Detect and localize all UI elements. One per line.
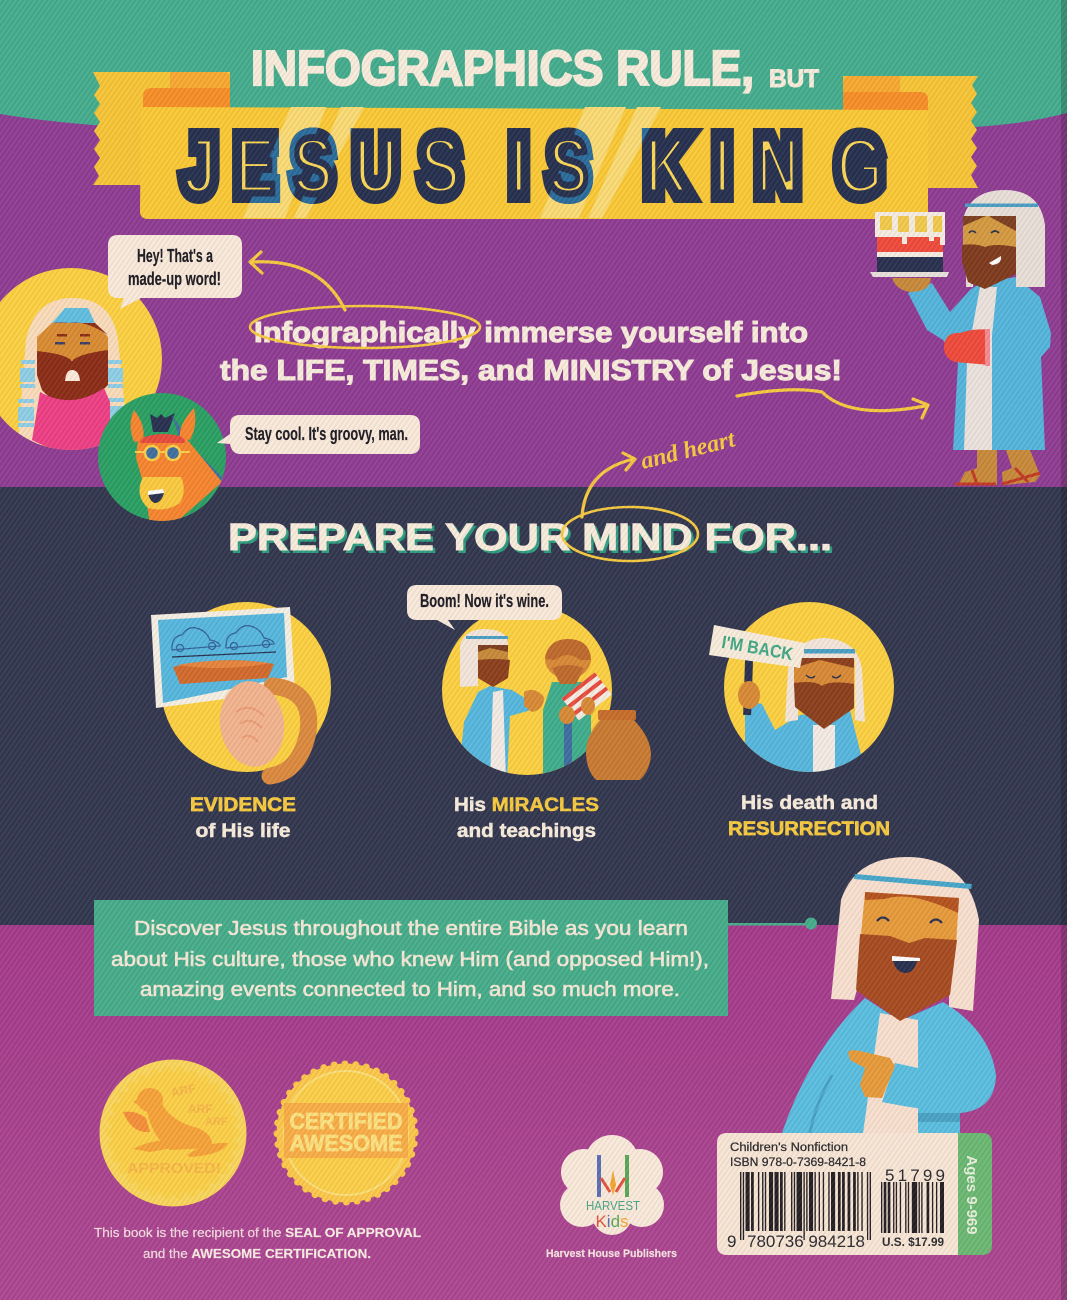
caption about seals: [94, 1226, 421, 1261]
teal description box: about His culture, those who knew Him (and opposed Him!),: [111, 948, 709, 971]
Jesus head: [460, 629, 508, 687]
speech bubble: made-up word: [108, 235, 242, 309]
label: miracles: and teachings: [457, 820, 596, 842]
background: navy band: [0, 487, 1067, 926]
banner right flap: [843, 76, 978, 188]
publisher name: Harvest House Publishers: [546, 1248, 677, 1260]
head and neck: [136, 438, 222, 525]
book category and ISBN: Children's Nonfiction: [730, 1140, 848, 1154]
photo card: [151, 607, 295, 708]
background: magenta band: [0, 925, 1067, 1300]
book category and ISBN: [730, 1140, 866, 1169]
ears: [130, 410, 144, 442]
teal description box: [94, 900, 728, 1016]
beard: [794, 682, 854, 729]
barcode digits: 780736 984218: [747, 1232, 865, 1251]
robe fold: [810, 1075, 832, 1133]
certified awesome seal: [276, 1064, 416, 1202]
water jar: [586, 710, 651, 780]
Jesus Is King lettering: JESUS IS KING: [183, 120, 883, 210]
speech bubble: wine: [407, 585, 562, 630]
section heading: Prepare your mind for: PREPARE YOUR MIND FOR...: [230, 520, 834, 562]
striped cloth: [562, 672, 612, 720]
speech bubble: groovy: [217, 415, 420, 454]
section heading: Prepare your mind for: PREPARE YOUR MIND FOR...: [228, 517, 832, 559]
background: purple band: [0, 113, 1067, 488]
hand under cake: [892, 278, 931, 292]
main barcode: [740, 1172, 871, 1240]
circle around MIND: [562, 507, 698, 561]
approved text: APPROVED!: [127, 1160, 221, 1177]
second man robe: [543, 682, 591, 780]
second man head: [545, 639, 591, 679]
arf text: ARF: [205, 1116, 228, 1128]
speech bubble: made-up word: made-up word!: [128, 269, 221, 289]
second man hands: [559, 697, 595, 724]
sign: [709, 625, 805, 668]
circle around Infographically: [250, 306, 480, 348]
label: resurrection: [728, 792, 890, 840]
hood: [964, 190, 1045, 287]
mouth: [892, 956, 920, 961]
illustration: resurrection I'm back: [709, 602, 894, 775]
age band: [958, 1133, 992, 1255]
arrow: mind to and heart: [582, 453, 635, 517]
oven mitt: [944, 329, 990, 365]
caption about seals: and the AWESOME CERTIFICATION.: [143, 1247, 371, 1261]
book edge shadow: [1061, 0, 1067, 1300]
speech bubble: groovy: Stay cool. It's groovy, man.: [245, 424, 408, 444]
hand: [738, 681, 760, 709]
barcode digits: U.S. $17.99: [882, 1237, 944, 1249]
legs and sandals: [955, 450, 1040, 485]
illustration: Jesus holding cake: [870, 190, 1051, 485]
label: evidence: of His life: [196, 820, 291, 842]
label: evidence: EVIDENCE: [190, 794, 296, 816]
add-on barcode: [881, 1182, 944, 1233]
publisher logo: Harvest Kids: HARVEST: [586, 1199, 640, 1213]
eyes: [969, 231, 999, 233]
tagline text: the LIFE, TIMES, and MINISTRY of Jesus!: [220, 355, 842, 387]
pink tunic: [32, 388, 110, 451]
beard: [856, 934, 957, 1021]
hood and shawl: [18, 298, 125, 445]
illustration: water to wine miracle: [442, 605, 651, 780]
barcode digits: [727, 1166, 945, 1251]
cake: [870, 212, 949, 277]
beard: [37, 350, 108, 405]
hood: [785, 638, 865, 722]
arf text: [170, 1081, 228, 1128]
label: miracles: [454, 794, 599, 842]
ring and hand: [214, 677, 309, 776]
illustration: evidence circle with photo and ring: [151, 602, 331, 776]
sign pole: [743, 658, 753, 715]
lettering blue stripe tint: JESUS IS KING: [183, 120, 883, 210]
teal description box: Discover Jesus throughout the entire Bible as you learn: [134, 917, 688, 940]
background: teal top band: [0, 0, 1067, 135]
robe: [782, 998, 996, 1133]
label: resurrection: RESURRECTION: [728, 818, 890, 840]
banner main strip: [140, 107, 928, 219]
face: [860, 892, 959, 945]
arf text: ARF: [188, 1102, 213, 1116]
white sash: [964, 287, 997, 450]
age band: Ages 9-969: [963, 1155, 980, 1235]
label: evidence: [190, 794, 296, 842]
arrow: under Jesus pointing to character: [737, 390, 928, 418]
glasses: [135, 446, 190, 460]
hood: [831, 857, 979, 1011]
sign: I'M BACK: [720, 632, 795, 664]
cap: [52, 308, 95, 323]
certified awesome seal: CERTIFIED: [290, 1108, 402, 1134]
book category and ISBN: ISBN 978-0-7369-8421-8: [730, 1155, 866, 1169]
white tunic: [863, 1013, 918, 1133]
illustration: donkey with glasses: [98, 393, 226, 525]
label: miracles: His MIRACLES: [454, 794, 599, 816]
robe: [745, 703, 861, 772]
pointing hand: [848, 1050, 895, 1098]
title line: Infographics Rule, but: INFOGRAPHICS RULE,: [251, 42, 754, 96]
banner light stripes: [243, 107, 661, 218]
Jesus robe: [462, 686, 530, 773]
label: resurrection: His death and: [741, 792, 878, 814]
tagline text: Infographically immerse yourself into: [254, 317, 808, 349]
illustration: large smiling Jesus: [782, 857, 996, 1133]
barcode label: [717, 1133, 992, 1255]
muzzle: [139, 477, 184, 510]
publisher logo: Harvest Kids: [560, 1135, 664, 1235]
barcode digit gaps: [745, 1231, 867, 1249]
banner left flap: [93, 72, 230, 185]
beard: [962, 244, 1016, 289]
headband: [854, 874, 972, 889]
title line: Infographics Rule, but: BUT: [769, 65, 819, 93]
illustration: bearded man in yellow circle: [0, 268, 162, 451]
teal description box: amazing events connected to Him, and so much more.: [140, 978, 680, 1001]
connector line to Jesus: [728, 918, 817, 930]
sleeve and cuff: [882, 1060, 996, 1113]
arf text: ARF: [170, 1081, 197, 1100]
certified awesome seal: AWESOME: [290, 1130, 402, 1156]
mane: [150, 413, 175, 432]
handwritten note: and heart: and heart: [638, 426, 739, 475]
face: [37, 323, 108, 360]
robe: [908, 277, 1051, 450]
seal of approval: [100, 1060, 246, 1206]
basket: [173, 660, 274, 684]
speech bubble: wine: Boom! Now it's wine.: [420, 591, 549, 611]
caption about seals: This book is the recipient of the SEAL OF APPROVAL: [94, 1226, 421, 1240]
arrow: from word to speech bubble: [250, 252, 345, 310]
face: [794, 658, 854, 688]
speech bubble: made-up word: Hey! That's a: [137, 246, 214, 266]
barcode digits: 51799: [885, 1166, 945, 1185]
face: [963, 216, 1016, 250]
lettering inline: JESUS IS KING: [183, 120, 883, 210]
tagline text: [220, 317, 842, 387]
publisher logo: Harvest Kids: Kids: [595, 1212, 629, 1231]
cars drawing: [172, 626, 276, 657]
barcode digits: 9: [727, 1232, 736, 1251]
dog silhouette: [123, 1088, 228, 1157]
title banner: Jesus Is King: [93, 72, 978, 219]
